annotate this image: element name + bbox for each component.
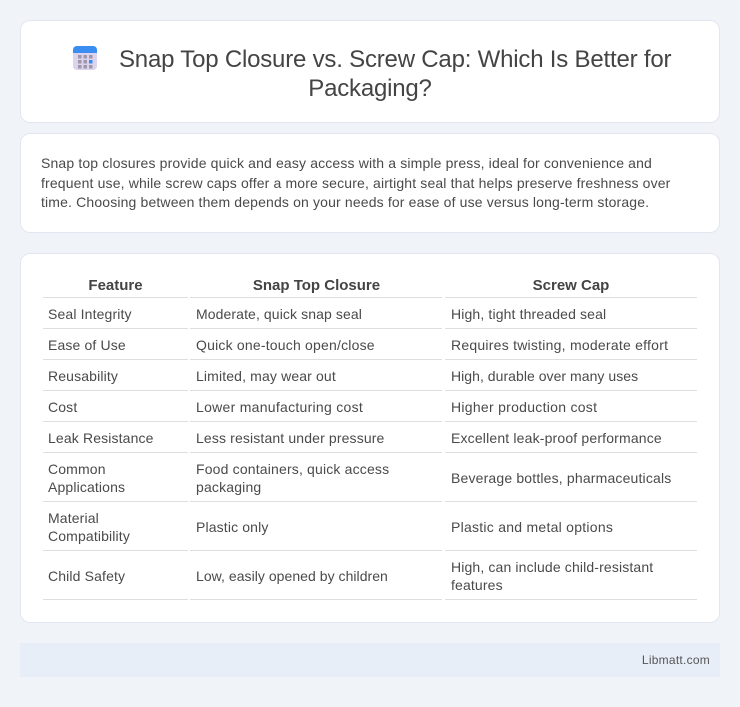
row: common applications: Food containers, quick access — [196, 461, 389, 477]
row: ease of use: Requires twisting, moderate effort — [451, 337, 668, 353]
row: ease of use: Ease of Use — [48, 337, 126, 353]
row: cost: Cost — [48, 399, 77, 415]
row: child safety: High, can include child-resistant — [451, 559, 653, 575]
icon: calendar grid — [73, 46, 97, 70]
row: leak resistance: Leak Resistance — [48, 430, 154, 446]
row: seal integrity: Moderate, quick snap seal — [196, 306, 362, 322]
row: common applications: Common — [48, 461, 106, 477]
panel: comparison table card — [20, 253, 720, 623]
footer source text: Libmatt.com — [642, 653, 710, 667]
summary text: time. Choosing between them depends on your needs for ease of use versus long-term storage. — [41, 194, 649, 210]
row: common applications — [48, 461, 671, 495]
row: ease of use: Quick one-touch open/close — [196, 337, 375, 353]
row: cost: Higher production cost — [451, 399, 597, 415]
row: child safety: Child Safety — [48, 568, 125, 584]
row: common applications: Applications — [48, 479, 125, 495]
row: child safety: Low, easily opened by children — [196, 568, 388, 584]
row: child safety: features — [451, 577, 503, 593]
row: material compatibility: Plastic and metal options — [451, 519, 613, 535]
summary text: frequent use, while screw caps offer a more secure, airtight seal that helps preserve freshness over — [41, 175, 670, 191]
row: reusability — [48, 368, 638, 384]
panel: title card — [20, 20, 720, 123]
title: Snap Top Closure vs. Screw Cap: Which Is Better for — [119, 46, 671, 73]
summary text: Snap top closures provide quick and easy access with a simple press, ideal for convenience and — [41, 155, 652, 171]
footer bar — [20, 643, 720, 677]
row: seal integrity — [48, 306, 606, 322]
table header: Screw Cap — [533, 277, 609, 294]
row: leak resistance — [48, 430, 662, 446]
panel: summary card — [20, 133, 720, 233]
row: leak resistance: Less resistant under pressure — [196, 430, 384, 446]
row: material compatibility: Material — [48, 510, 99, 526]
table header: Snap Top Closure — [253, 277, 380, 294]
summary text — [41, 155, 670, 210]
row: ease of use — [48, 337, 668, 353]
row: child safety — [48, 559, 654, 593]
table header: Feature — [88, 277, 143, 294]
row: material compatibility: Plastic only — [196, 519, 268, 535]
row: leak resistance: Excellent leak-proof performance — [451, 430, 662, 446]
row: common applications: Beverage bottles, pharmaceuticals — [451, 470, 671, 486]
row: common applications: packaging — [196, 479, 261, 495]
row: cost: Lower manufacturing cost — [196, 399, 363, 415]
row: material compatibility — [48, 510, 613, 544]
row: material compatibility: Compatibility — [48, 528, 130, 544]
row: cost — [48, 399, 597, 415]
row: seal integrity: Seal Integrity — [48, 306, 132, 322]
row: reusability: Reusability — [48, 368, 118, 384]
row: seal integrity: High, tight threaded seal — [451, 306, 606, 322]
title — [119, 46, 672, 102]
row: reusability: High, durable over many uses — [451, 368, 638, 384]
table header — [88, 277, 609, 294]
title: Packaging? — [308, 75, 432, 102]
row: reusability: Limited, may wear out — [196, 368, 336, 384]
